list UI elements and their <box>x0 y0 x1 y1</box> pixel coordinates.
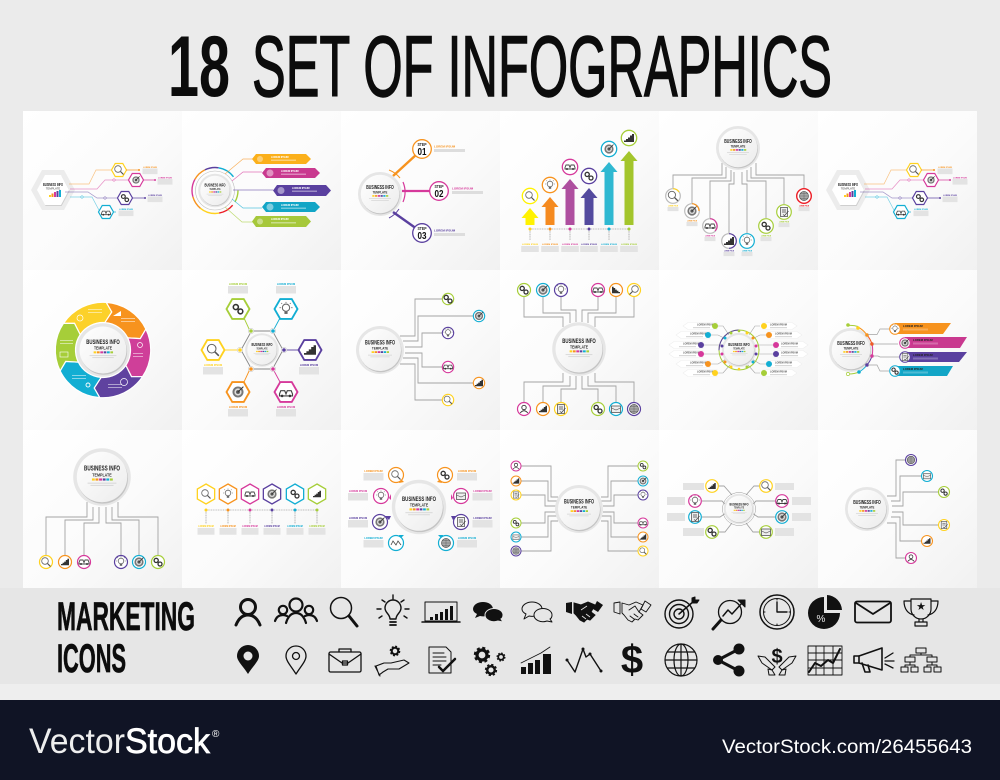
panel: ring with ribbons: LOREM IPSUM <box>292 187 310 190</box>
icon: trophy: ★ <box>916 601 926 613</box>
panel: arc with ribbons: LOREM IPSUM <box>913 338 933 342</box>
panel: ring with ribbons <box>192 154 331 227</box>
icon: map pin filled <box>237 645 259 674</box>
panel: three steps: STEP <box>434 184 444 189</box>
icon: laptop chart <box>422 602 460 622</box>
footer image id: VectorStock.com/26455643 <box>722 736 972 758</box>
icon: handshake filled <box>566 601 603 622</box>
icon: hands with dollar <box>758 646 796 675</box>
icon: magnifier trend <box>713 600 745 629</box>
panel: three steps: LOREM IPSUM <box>434 144 456 148</box>
icon: share <box>713 644 744 676</box>
panel: right tree six circles <box>356 293 485 406</box>
panel: ring with ribbons: LOREM IPSUM <box>271 156 289 159</box>
panel: ring with ribbons: LOREM IPSUM <box>281 204 299 207</box>
icon: dollar: $ <box>621 638 643 682</box>
icon: envelope <box>855 602 891 622</box>
icon: briefcase <box>329 649 361 672</box>
icon strip background <box>0 588 1000 684</box>
panel: hexagon branches repeated <box>826 164 968 218</box>
panel: speech bubble ring <box>348 468 492 550</box>
panel: arc with ribbons: LOREM IPSUM <box>903 324 923 328</box>
icon: chat filled <box>473 602 503 622</box>
icon: checklist document <box>429 647 455 673</box>
footer logo <box>29 722 220 761</box>
marketing icons heading: MARKETING <box>57 595 195 639</box>
panel: three steps: 03 <box>418 231 427 242</box>
icon: clock <box>760 595 794 629</box>
panel: three steps: STEP <box>418 142 426 147</box>
footer logo: Stock <box>125 722 210 761</box>
panel: hexagon branches <box>31 164 172 218</box>
panel: three steps: 01 <box>418 147 427 158</box>
icon: light bulb <box>377 595 409 625</box>
icon: handshake outline <box>614 601 651 622</box>
panel: three steps <box>358 140 483 242</box>
icon: line chart grid <box>808 646 842 675</box>
icon: magnifier <box>330 598 357 626</box>
panel: top medallion tree <box>666 126 811 256</box>
icon: chat outline <box>522 602 552 622</box>
icon: megaphone <box>854 648 894 672</box>
icon: zigzag line <box>566 648 602 672</box>
panel: hexagon timeline <box>197 484 326 535</box>
panel: rising arrows <box>521 130 638 252</box>
panel: cycle donut <box>55 302 151 398</box>
panel: butterfly cards <box>669 322 808 376</box>
icon: org chart <box>901 648 941 672</box>
icon: gears <box>475 648 505 675</box>
marketing icons heading <box>57 595 195 681</box>
title <box>168 19 832 115</box>
icon: map pin outline <box>286 646 306 674</box>
lower band <box>0 684 1000 700</box>
footer logo: ® <box>212 729 220 740</box>
panel: arc with ribbons <box>829 323 967 376</box>
panel: three steps: 02 <box>434 189 444 200</box>
footer bar <box>0 700 1000 780</box>
icon: globe <box>665 644 697 676</box>
panel backgrounds <box>23 111 977 588</box>
panel: right tree lower <box>845 454 950 564</box>
footer logo: Vector <box>29 722 125 761</box>
icon: hand with gear <box>375 646 409 676</box>
icon: target <box>665 597 699 628</box>
icon: pie chart <box>808 595 842 629</box>
title: 18 <box>168 19 230 115</box>
panel: two-sided tree <box>511 461 648 556</box>
icon: pie chart: % <box>817 614 826 625</box>
panel: bottom tree <box>40 448 164 568</box>
panel: hexagon hub <box>202 282 322 416</box>
icon: group <box>275 598 317 623</box>
panel: ring with ribbons: LOREM IPSUM <box>271 218 289 221</box>
panel: arc with ribbons: LOREM IPSUM <box>903 367 923 371</box>
icon: growth bars <box>521 647 551 674</box>
panel: three steps: LOREM IPSUM <box>452 186 474 190</box>
panel: ring with ribbons: LOREM IPSUM <box>281 170 299 173</box>
icon: hands with dollar: $ <box>771 646 783 668</box>
panel: small hub with eight circles <box>667 480 811 538</box>
panel: arc with ribbons: LOREM IPSUM <box>913 353 933 357</box>
icon: trophy <box>904 599 938 626</box>
panel: three steps: STEP <box>418 226 426 231</box>
marketing icons heading: ICONS <box>57 637 126 681</box>
icon: person <box>236 600 260 625</box>
panel: three steps: LOREM IPSUM <box>434 228 456 232</box>
panel: twelve circle tree <box>518 284 640 416</box>
